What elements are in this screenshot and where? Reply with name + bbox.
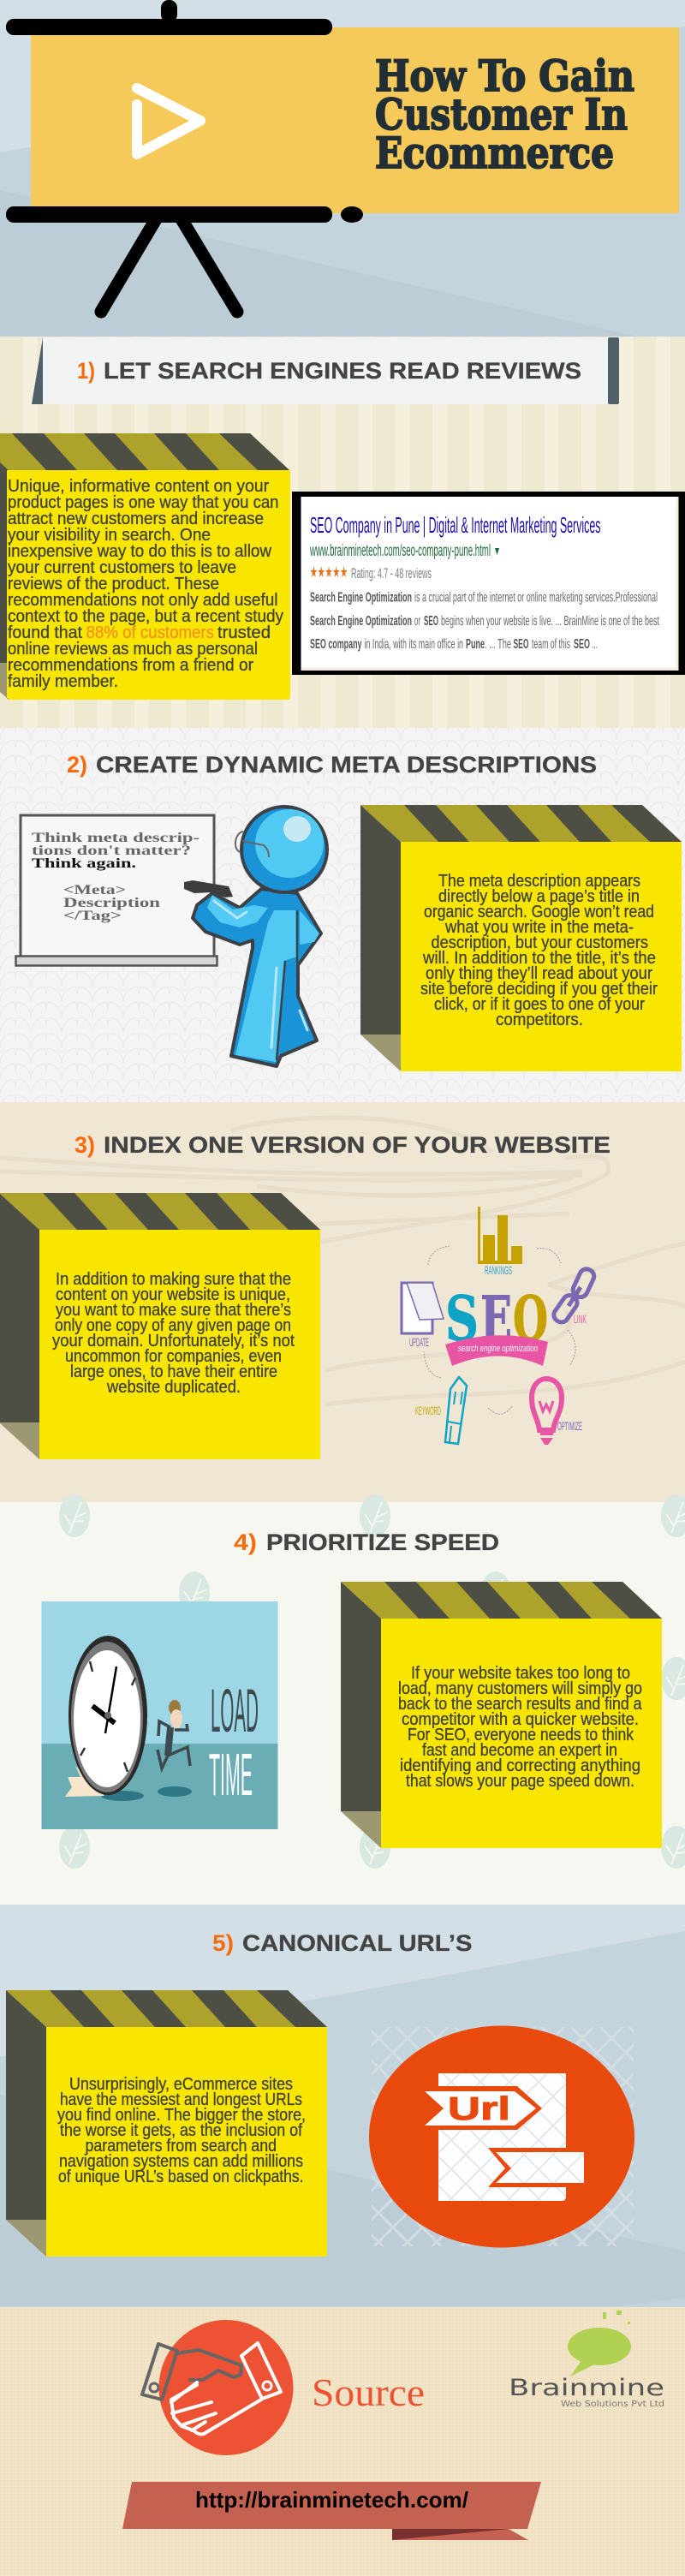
title: Customer In [375, 89, 628, 140]
white hand [171, 2343, 281, 2434]
head [241, 807, 327, 892]
heading 3: 3) [74, 1132, 95, 1158]
panel: box 3 text card: In addition to making sure that the [56, 1270, 291, 1289]
panel: box 4 text card: load, many customers will simply go [398, 1679, 642, 1698]
lower tag [488, 2148, 591, 2187]
sky and floor [41, 1601, 277, 1744]
panel: box 1 text card: 88% of customers [86, 623, 214, 642]
panel: box 5 text card: of unique URL’s based on clickpaths. [58, 2168, 303, 2186]
pencil: KEYWORD [415, 1404, 441, 1417]
panel: section 2 background [0, 728, 685, 1102]
panel: section 4 background [0, 1494, 685, 1905]
illustration: whiteboard [15, 815, 217, 966]
panel: box 4 text card: back to the search results and find a [398, 1695, 642, 1714]
notepad [402, 1283, 444, 1349]
icon: URL badge [369, 2026, 634, 2247]
panel: box 1 text card: recommendations not only add useful [8, 591, 277, 610]
title [375, 51, 634, 178]
panel: box 3 text card: uncommon for companies, even [65, 1347, 282, 1366]
panel: box 4 text card: competitor with a quicker website. [402, 1710, 639, 1729]
illustration: blue figure with marker [184, 807, 327, 1066]
document [438, 2073, 566, 2201]
illustration: whiteboard: tions don't matter? [32, 844, 191, 858]
illustration: whiteboard: Think again. [32, 856, 136, 871]
heading 4: 4) [234, 1530, 257, 1555]
panel: footer background [0, 2307, 685, 2576]
icon: play triangle [137, 88, 200, 154]
SEO word: S [445, 1282, 479, 1355]
title: Ecommerce [375, 128, 614, 178]
rankings bars: RANKINGS [485, 1263, 512, 1277]
result description: SEO [424, 614, 438, 629]
source label: Source [312, 2370, 425, 2414]
panel: box 2 text card: will. In addition to the title, it’s the [422, 949, 656, 968]
illustration: load time [41, 1601, 277, 1829]
rating stars [310, 564, 432, 581]
panel: box 1 text card: inexpensive way to do this is to allow [8, 542, 272, 561]
icon: stand bottom bar [6, 206, 332, 223]
panel: box 1 text card: reviews of the product. These [8, 575, 219, 593]
panel: box 3 text card: your domain. Unfortunately, it’s not [52, 1332, 295, 1351]
panel: section 3 background [0, 1102, 685, 1502]
url ribbon: http://brainminetech.com/ [195, 2487, 468, 2513]
Brainmine logo: Web Solutions Pvt Ltd [561, 2400, 664, 2409]
panel: box 5 text card: you find online. The bigger the store, [57, 2106, 306, 2125]
title: How To Gain [375, 51, 634, 101]
icon: stand top bar [6, 19, 332, 35]
panel: box 2 text card: click, or if it goes to one of your [434, 995, 645, 1014]
panel: box 1 text card: recommendations from a friend or [8, 656, 253, 675]
Brainmine logo [509, 2311, 664, 2409]
panel: box 1 text card: attract new customers and increase [8, 510, 264, 528]
glasses [235, 832, 269, 857]
icon: stand legs [101, 219, 237, 312]
text: LOAD [211, 1678, 259, 1745]
panel: header background [0, 0, 685, 337]
running man [158, 1700, 190, 1768]
illustration: whiteboard: Think meta descrip- [32, 831, 200, 845]
panel: box 4 text card: that slows your page speed down. [406, 1772, 634, 1791]
panel: box 1 text card: online reviews as much as personal [8, 640, 258, 659]
illustration: whiteboard: </Tag> [63, 909, 122, 923]
result description: SEO [514, 637, 529, 652]
panel: search result screenshot [292, 492, 685, 675]
light bulb [532, 1379, 582, 1445]
heading 1 band: 1) [77, 358, 95, 384]
panel: box 2 text card: competitors. [496, 1011, 583, 1029]
rankings bars [478, 1207, 522, 1277]
panel: box 4 text card: identifying and correcting anything [400, 1756, 640, 1775]
panel: box 1 text card: found that [8, 623, 82, 642]
result description: ... [592, 637, 598, 652]
result description: team of this [532, 637, 570, 652]
result description: . ... The [485, 637, 511, 652]
result description: or [414, 614, 420, 629]
panel: box 3 text card: only one copy of any given page on [55, 1316, 291, 1335]
panel: section 1 background [0, 337, 685, 728]
icon: stand stem [161, 0, 177, 22]
panel: box 1 text card: trusted [217, 623, 271, 642]
orange circle [369, 2026, 634, 2247]
result description: in India, with its main office in [365, 637, 463, 652]
result description: SEO [574, 637, 590, 652]
rating stars: Rating: 4.7 - 48 reviews [351, 565, 432, 581]
panel: box 3 text card: content on your website is unique, [56, 1285, 290, 1304]
heading 3: INDEX ONE VERSION OF YOUR WEBSITE [104, 1132, 611, 1158]
cycle arrows [424, 1246, 575, 1414]
marker [184, 880, 233, 897]
grey hand [142, 2344, 241, 2400]
panel: box 1 text card: context to the page, but a recent study [8, 607, 283, 626]
panel: box 2 text card [360, 805, 682, 1071]
heading 2: CREATE DYNAMIC META DESCRIPTIONS [96, 752, 597, 778]
panel: box 3 text card: you want to make sure that there’s [56, 1301, 291, 1320]
panel: box 5 text card: Unsurprisingly, eCommerce sites [69, 2075, 293, 2094]
result description: SEO company [310, 637, 362, 652]
heading 5: CANONICAL URL’S [242, 1930, 473, 1956]
panel: box 2 text card: only thing they’ll read about your [426, 964, 652, 983]
panel: box 4 text card [341, 1582, 662, 1848]
illustration: SEO cycle graphic: OPTIMIZE [557, 1419, 582, 1433]
Brainmine logo: Brainmine [509, 2375, 664, 2401]
SEO word [445, 1282, 548, 1355]
panel: box 1 text card: your visibility in search. One [8, 526, 211, 545]
pink banner: search engine optimization [458, 1344, 538, 1354]
pink banner [445, 1335, 548, 1366]
panel: box 2 text card: organic search. Google won’t read [424, 903, 654, 921]
url tag [425, 2086, 542, 2130]
panel: box 4 text card: For SEO, everyone needs to think [408, 1726, 634, 1744]
pencil [415, 1377, 467, 1444]
illustration: SEO cycle graphic [402, 1207, 596, 1445]
panel: box 4 text card: fast and become an expert in [422, 1741, 617, 1760]
heading 4: PRIORITIZE SPEED [266, 1530, 499, 1555]
body [193, 889, 321, 1066]
panel: box 2 text card: site before deciding if you get their [420, 980, 658, 999]
chain link [551, 1267, 596, 1326]
panel: section 5 background [0, 1905, 685, 2307]
panel: box 5 text card: navigation systems can add millions [59, 2152, 303, 2171]
heading 1 band [32, 337, 619, 404]
url tag: Url [448, 2091, 510, 2127]
notepad: UPDATE [409, 1335, 429, 1349]
screen [31, 27, 679, 213]
panel: box 3 text card: large ones, to have their entire [70, 1363, 277, 1381]
heading 2: 2) [67, 752, 87, 778]
text: TIME [209, 1741, 253, 1808]
rating stars: ★★★★★ [310, 564, 348, 581]
icon: handshake badge [142, 2320, 293, 2455]
SEO word: O [513, 1282, 548, 1355]
heading 1 band: LET SEARCH ENGINES READ REVIEWS [104, 358, 581, 384]
result description: Pune [466, 637, 485, 652]
shadows [101, 1791, 144, 1801]
panel: box 1 text card: your current customers to leave [8, 558, 236, 577]
panel: box 5 text card [6, 1990, 327, 2257]
panel: box 1 text card: Unique, informative content on your [8, 477, 269, 496]
icon: stand dot [341, 206, 363, 223]
chain link: LINK [574, 1312, 587, 1326]
url ribbon [122, 2482, 541, 2540]
result url: www.brainminetech.com/seo-company-pune.html [309, 542, 491, 560]
result description: Search Engine Optimization [310, 614, 412, 629]
panel: box 3 text card: website duplicated. [106, 1378, 241, 1397]
illustration: whiteboard: Description [63, 896, 160, 910]
panel: box 3 text card [0, 1193, 320, 1459]
SEO word: E [480, 1282, 512, 1355]
panel: box 2 text card: directly below a page’s title in [438, 887, 640, 906]
panel: box 1 text card: product pages is one way that you can [8, 493, 279, 512]
panel: title banner on projector screen [6, 0, 679, 312]
panel: box 2 text card: The meta description appears [438, 872, 640, 891]
panel: box 5 text card: parameters from search and [86, 2137, 277, 2156]
panel: box 5 text card: the worse it gets, as the inclusion of [60, 2121, 302, 2140]
result description [310, 591, 659, 652]
panel: box 2 text card: description, but your customers [432, 933, 648, 952]
panel: box 1 text card [0, 433, 290, 700]
panel: box 5 text card: have the messiest and longest URLs [60, 2090, 302, 2109]
panel: box 1 text card: family member. [8, 672, 118, 691]
panel: box 2 text card: what you write in the meta- [444, 918, 634, 937]
result description: Search Engine Optimization [310, 591, 412, 605]
clock [68, 1636, 147, 1795]
crack [65, 1766, 104, 1797]
result url [309, 542, 499, 560]
heading 5: 5) [212, 1930, 234, 1956]
illustration: whiteboard: <Meta> [63, 883, 126, 897]
panel: box 4 text card: If your website takes too long to [411, 1664, 630, 1683]
